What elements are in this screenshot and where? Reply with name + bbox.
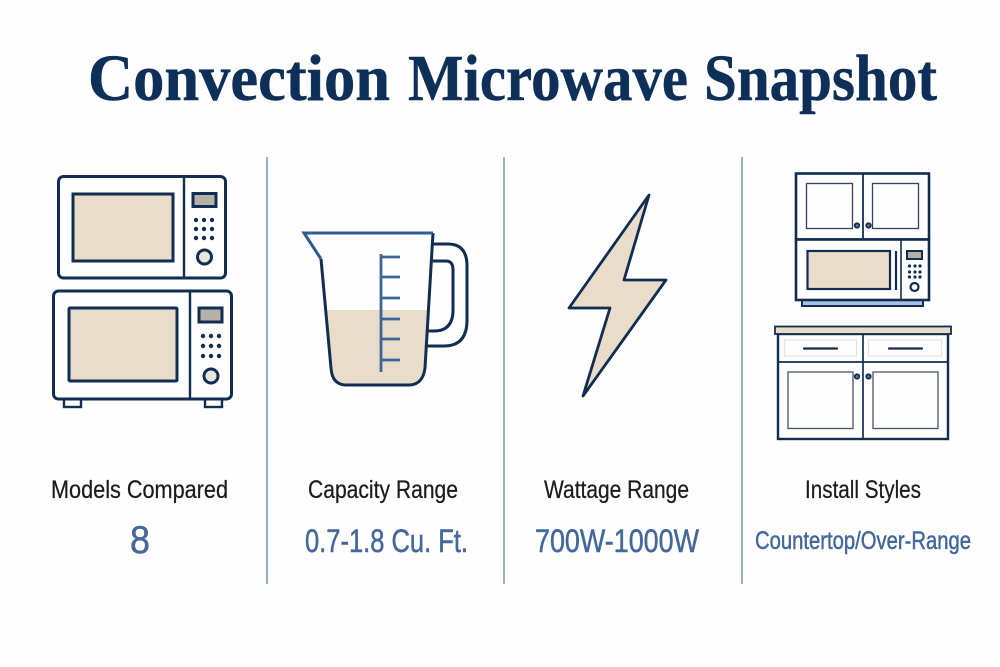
icon: lightning bolt [569,195,666,396]
value: wattage range: 700W-1000W [535,523,700,559]
icon: lower microwave [54,291,232,407]
icon: installation cabinets [775,174,951,439]
icon: countertop [775,326,951,334]
title: Convection [88,42,390,115]
value: capacity range: 0.7-1.8 Cu. Ft. [305,523,468,559]
icon: measuring cup [304,233,467,385]
title [88,42,937,115]
icon: upper cabinet [796,174,929,240]
value: models compared: 8 [130,519,150,562]
title: Snapshot [704,42,937,115]
label: wattage range: Wattage Range [544,476,689,504]
icon: upper microwave [58,176,226,278]
icon: over-range microwave [796,240,929,306]
label: models compared: Models Compared [51,476,228,504]
icon: base cabinet [778,334,948,439]
label: capacity range: Capacity Range [308,476,458,504]
measuring scale [381,254,400,372]
label: install styles: Install Styles [805,476,921,504]
icon: stacked microwaves [54,176,232,407]
title: Microwave [408,42,688,115]
